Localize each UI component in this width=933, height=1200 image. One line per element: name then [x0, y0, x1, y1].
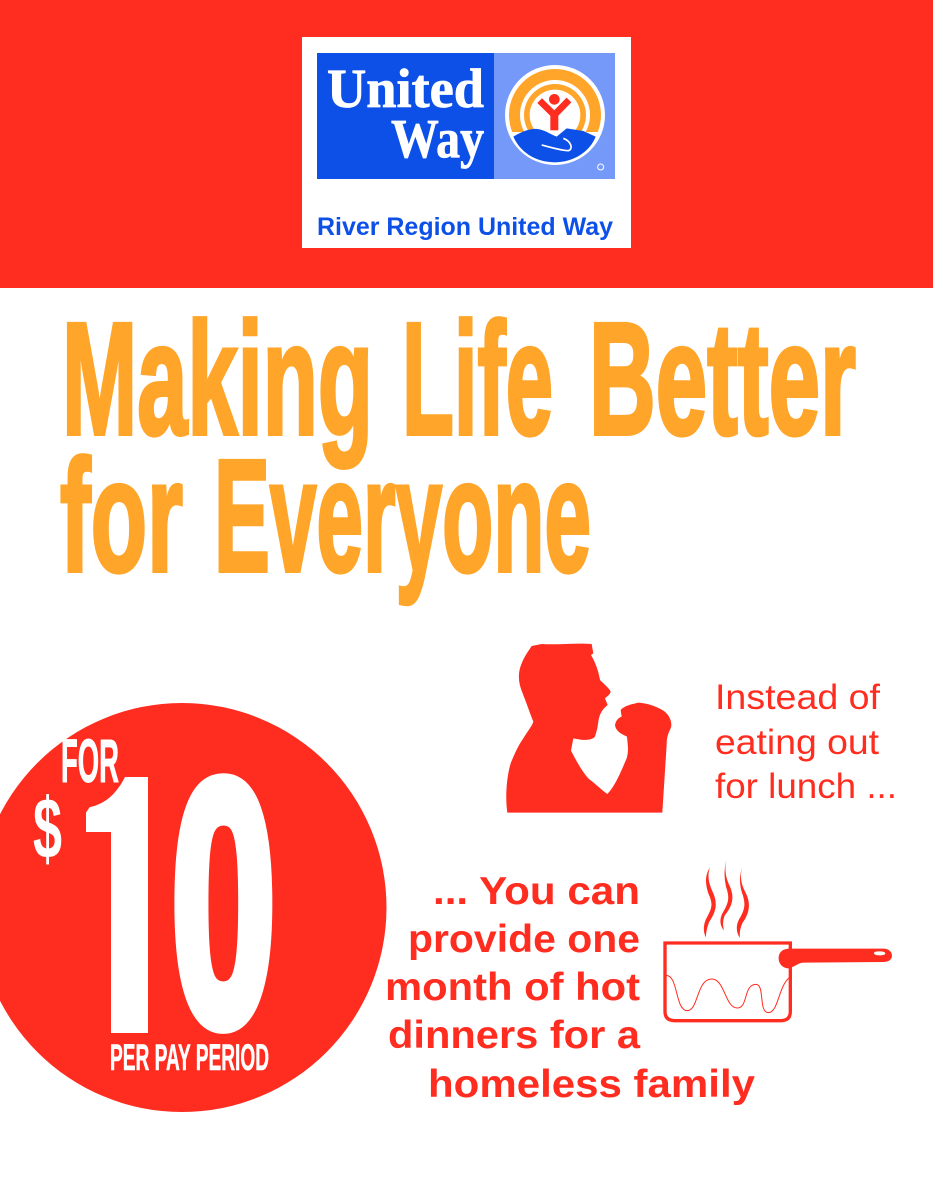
title: Life [402, 289, 553, 468]
text: you can provide hot dinners [385, 870, 755, 1106]
handle [779, 949, 892, 968]
logo emblem panel [494, 53, 615, 179]
big number 10: 0 [171, 709, 276, 1097]
title: for [60, 426, 183, 605]
logo wordmark panel [317, 53, 494, 179]
title: Everyone [214, 426, 591, 605]
text: instead of eating out for lunch: Instead of [715, 678, 880, 717]
logo wordmark panel: United [327, 58, 484, 119]
title: Making [62, 289, 373, 468]
text: instead of eating out for lunch [715, 678, 897, 806]
pot body [665, 943, 790, 1021]
logo organisation name: River Region United Way [317, 213, 613, 241]
text: you can provide hot dinners: dinners for a [388, 1014, 640, 1057]
big number 10: 1 [80, 705, 170, 1121]
title [60, 289, 856, 605]
logo wordmark panel: Way [391, 108, 484, 169]
text: instead of eating out for lunch: eating out [715, 723, 879, 762]
text: instead of eating out for lunch: for lunch ... [715, 767, 897, 806]
icon: man eating silhouette [506, 644, 671, 813]
big number 10 [86, 773, 272, 1034]
icon: steaming pot [665, 859, 892, 1021]
red circle: for $10 per pay period [0, 703, 386, 1121]
water line [666, 975, 789, 1013]
label: per pay period: PER PAY PERIOD [110, 1037, 269, 1078]
text: you can provide hot dinners: ... You can [433, 870, 640, 913]
steam [704, 859, 749, 938]
text: you can provide hot dinners: month of hot [385, 966, 640, 1009]
label: dollar sign: $ [33, 781, 62, 877]
text: you can provide hot dinners: provide one [408, 918, 640, 961]
text: you can provide hot dinners: homeless family [428, 1063, 755, 1106]
logo card [302, 37, 631, 248]
header banner [0, 0, 933, 288]
red circle: for $10 per pay period: FOR [61, 727, 119, 795]
